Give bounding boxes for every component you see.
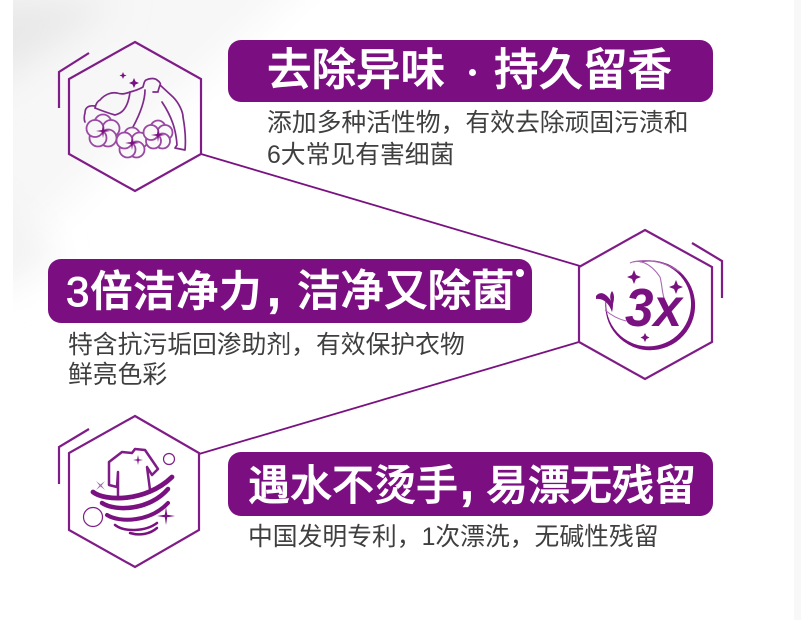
description 2: 特含抗污垢回渗助剂，有效保护衣物 xyxy=(68,332,465,359)
icon: clothes and flowers hexagon xyxy=(59,42,201,191)
description 2: 鲜亮色彩 xyxy=(68,362,167,389)
description 1: 6大常见有害细菌 xyxy=(267,142,454,169)
heading banner 1: 持久留香 xyxy=(494,46,672,95)
description 2 xyxy=(68,332,465,389)
icon: 3x moon hexagon xyxy=(579,230,722,379)
connector lines xyxy=(199,154,580,454)
heading banner 2: 洁净又除菌 xyxy=(297,268,514,316)
heading banner 3 xyxy=(228,452,713,516)
heading banner 2: 3倍洁净力 xyxy=(66,268,262,315)
heading banner 2: , xyxy=(267,261,281,317)
heading banner 3: 易漂无残留 xyxy=(486,462,696,509)
description 1 xyxy=(267,110,689,169)
description 3: 中国发明专利，1次漂洗，无碱性残留 xyxy=(248,524,659,551)
heading banner 1 xyxy=(228,40,713,102)
description 1: 添加多种活性物，有效去除顽固污渍和 xyxy=(267,110,689,137)
heading banner 3: , xyxy=(460,454,474,510)
heading banner 2 xyxy=(48,259,532,323)
heading banner 3: 遇水不烫手 xyxy=(248,462,458,509)
icon text: 3x: 3x xyxy=(625,278,684,338)
icon: shirt in whirl hexagon xyxy=(59,416,199,567)
heading banner 1: 去除异味 xyxy=(267,46,445,95)
